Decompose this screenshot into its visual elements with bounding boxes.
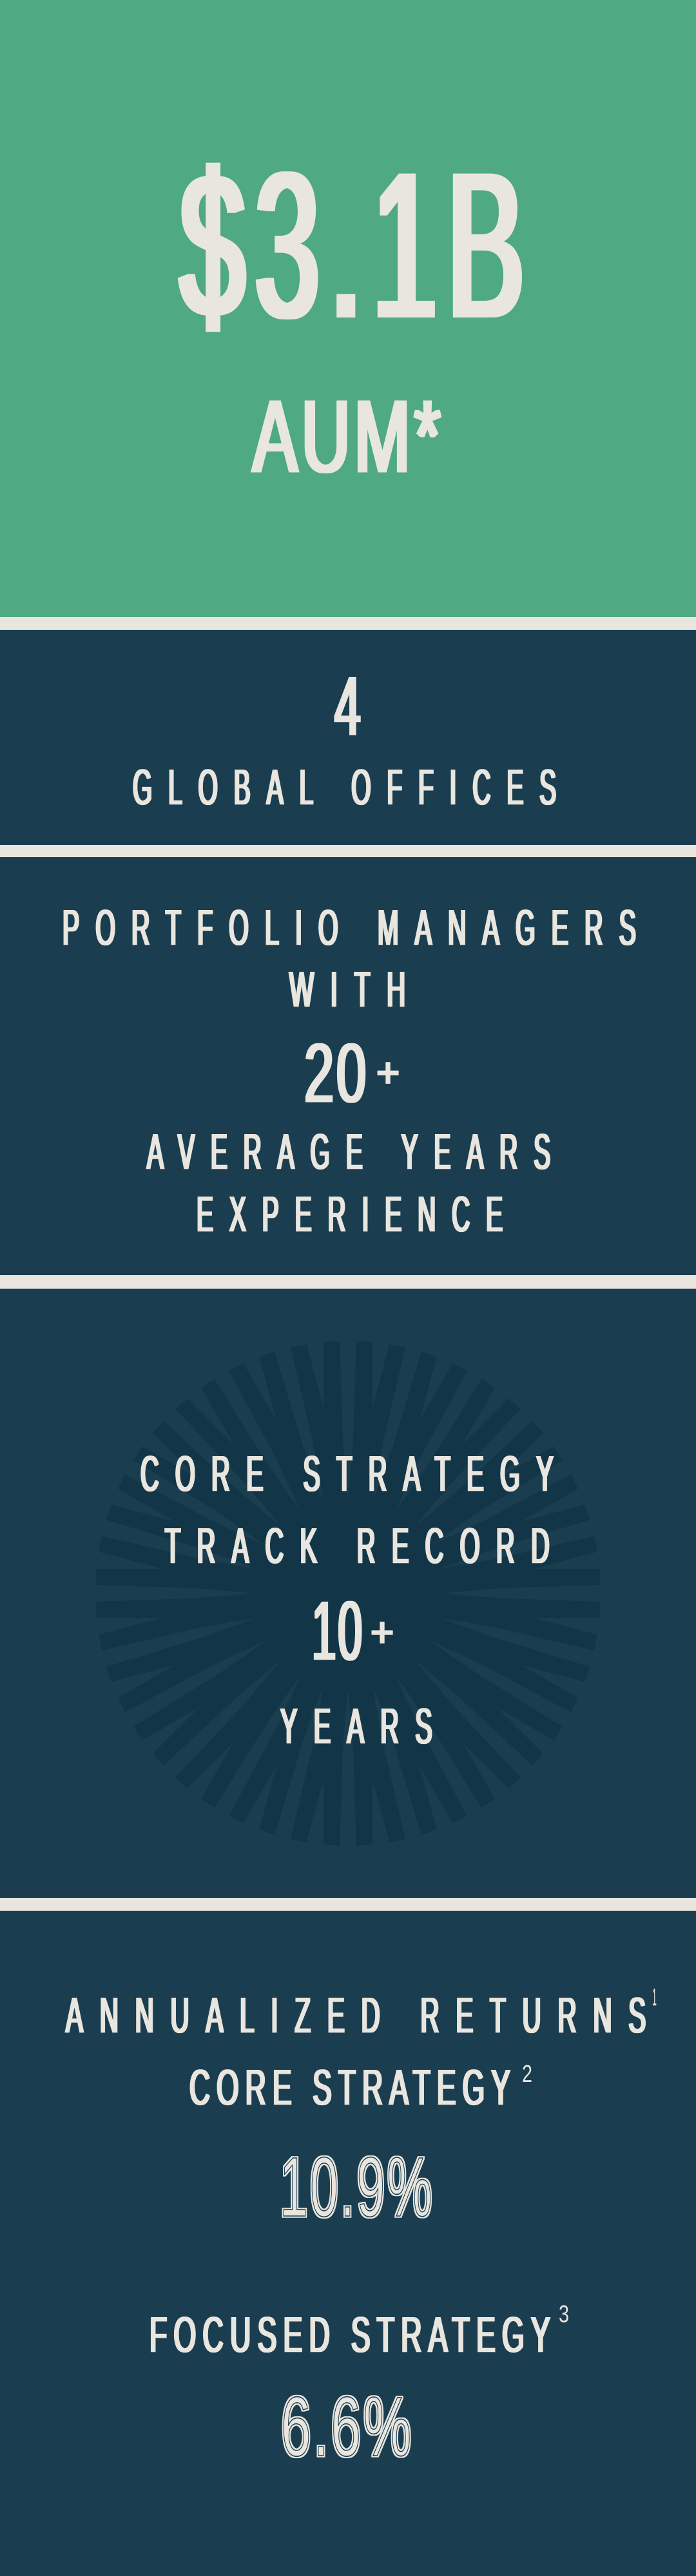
starburst background [90,1336,606,1851]
label: focused strategy: 3 [559,2301,569,2328]
number: 10+: + [370,1608,394,1656]
value: 6.6%: 6.6% [281,2379,414,2474]
number: 4: 4 [334,659,363,753]
label: core strategy: 2 [522,2061,532,2088]
number: 20+: + [376,1048,400,1096]
panel: assets under management [0,0,696,617]
label: with: WITH [289,961,422,1018]
label: AUM: AUM* [253,379,445,495]
label: core strategy [189,2059,532,2116]
panel: global offices [0,630,696,845]
heading: annualized returns: 1 [652,1984,657,2011]
panel: track record [0,1289,696,1898]
value: 10.9%: 10.9% [280,2139,434,2234]
panel: annualized returns [0,1911,696,2576]
number: 10+: 10 [312,1584,364,1678]
number: 20+: 20 [304,1026,369,1120]
label: years: YEARS [280,1698,449,1754]
panel: portfolio managers [0,857,696,1275]
